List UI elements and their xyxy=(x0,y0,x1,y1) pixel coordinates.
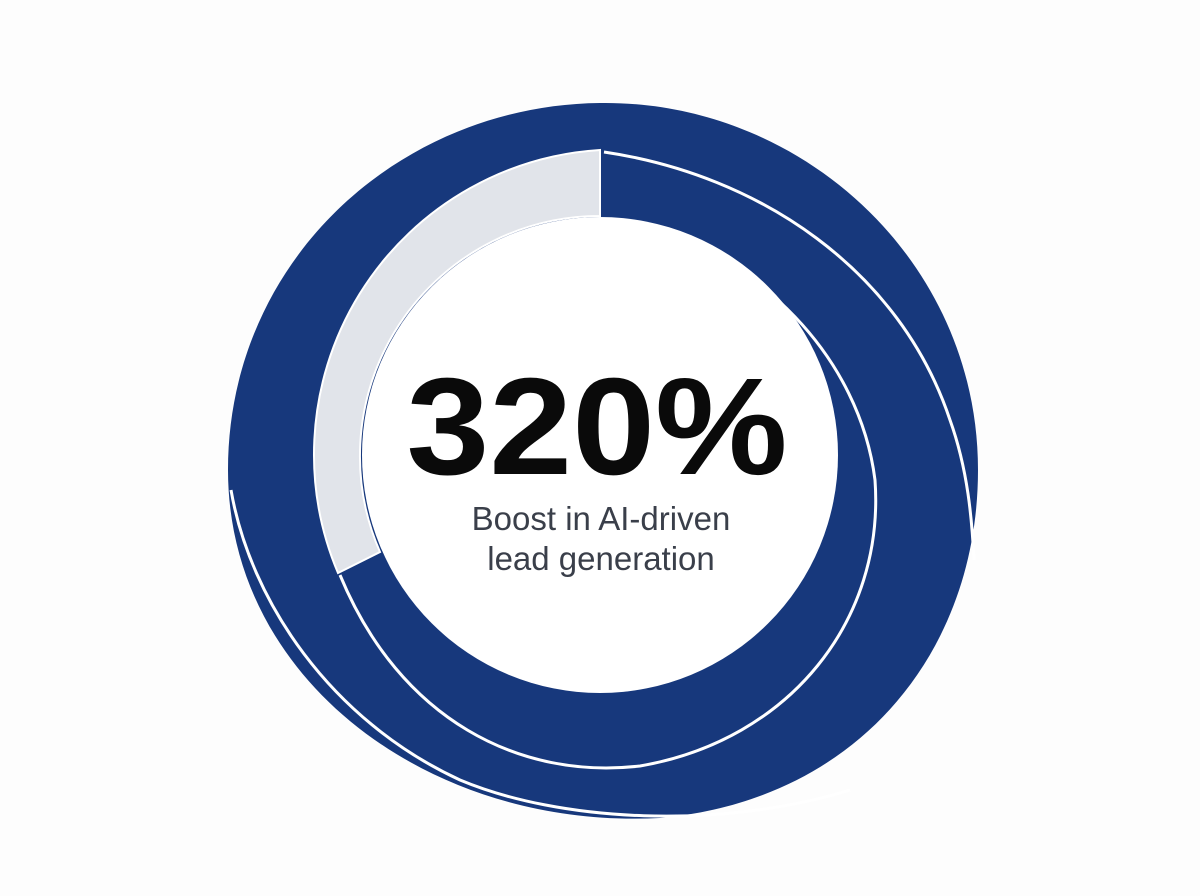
caption: Boost in AI-driven xyxy=(472,500,730,537)
big number: 320% xyxy=(406,350,788,504)
center white circle xyxy=(362,217,838,693)
caption: lead generation xyxy=(487,540,715,577)
inner grey arc segment xyxy=(314,150,600,573)
white spiral lines xyxy=(231,152,974,816)
outer spiral band xyxy=(228,103,978,819)
